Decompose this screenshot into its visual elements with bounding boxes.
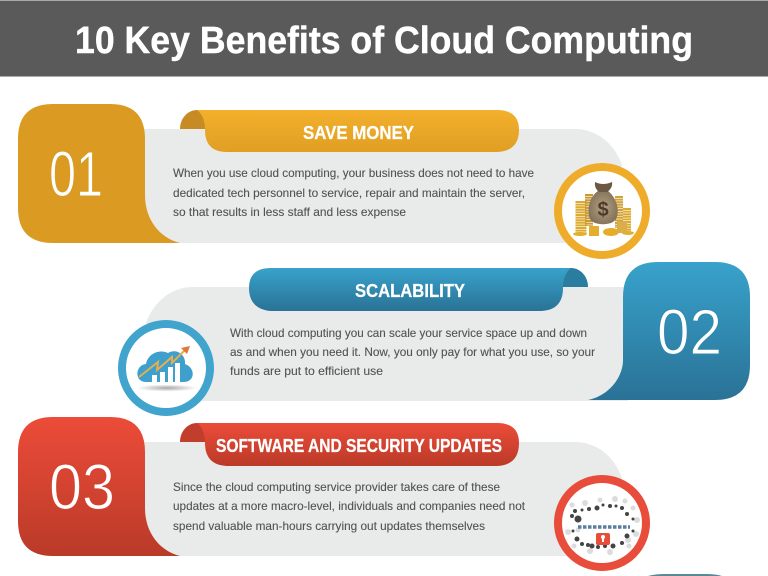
body text: With cloud computing you can scale your service space up and down [230, 326, 587, 340]
panel: save money [18, 104, 646, 255]
icon: money bag and coins: $ [597, 199, 609, 221]
body text: so that results in less staff and less expense [173, 205, 406, 219]
body text: dedicated tech personnel to service, repair and maintain the server, [173, 186, 525, 200]
heading: SOFTWARE AND SECURITY UPDATES [216, 436, 502, 456]
heading: SCALABILITY [355, 281, 465, 301]
number 03: 03 [49, 451, 115, 523]
number block 03 [18, 417, 180, 556]
number 01: 01 [49, 138, 103, 210]
body text [173, 166, 534, 219]
number block 02 [588, 262, 750, 400]
body text: funds are put to efficient use [230, 364, 383, 378]
body text: spend valuable man-hours carrying out updates themselves [173, 519, 485, 533]
body text [173, 480, 526, 533]
body text: updates at a more macro-level, individuals and companies need not [173, 499, 526, 513]
icon: money bag and coins [558, 167, 646, 255]
ribbon fold [556, 268, 588, 287]
panel: software and security updates [18, 417, 646, 567]
heading ribbon [197, 110, 519, 152]
panel background [140, 129, 622, 243]
number block 01 [18, 104, 180, 243]
heading: SAVE MONEY [303, 123, 414, 143]
icon: chained cloud with padlock [558, 479, 646, 567]
body text: When you use cloud computing, your business does not need to have [173, 166, 534, 180]
icon: cloud with rising arrow [122, 324, 210, 412]
body text: Since the cloud computing service provider takes care of these [173, 480, 500, 494]
body text [230, 326, 595, 378]
ribbon fold [180, 423, 212, 442]
header bar [0, 0, 768, 77]
next panel number block (cropped) [648, 574, 722, 576]
heading ribbon [197, 423, 519, 466]
body text: as and when you need it. Now, you only pay for what you use, so your [230, 345, 595, 359]
heading ribbon [249, 268, 571, 311]
panel background [140, 442, 622, 556]
panel: scalability [122, 262, 750, 412]
number 02: 02 [657, 296, 722, 368]
ribbon fold [180, 110, 212, 129]
title: 10 Key Benefits of Cloud Computing [75, 20, 693, 62]
panel background [146, 287, 628, 401]
